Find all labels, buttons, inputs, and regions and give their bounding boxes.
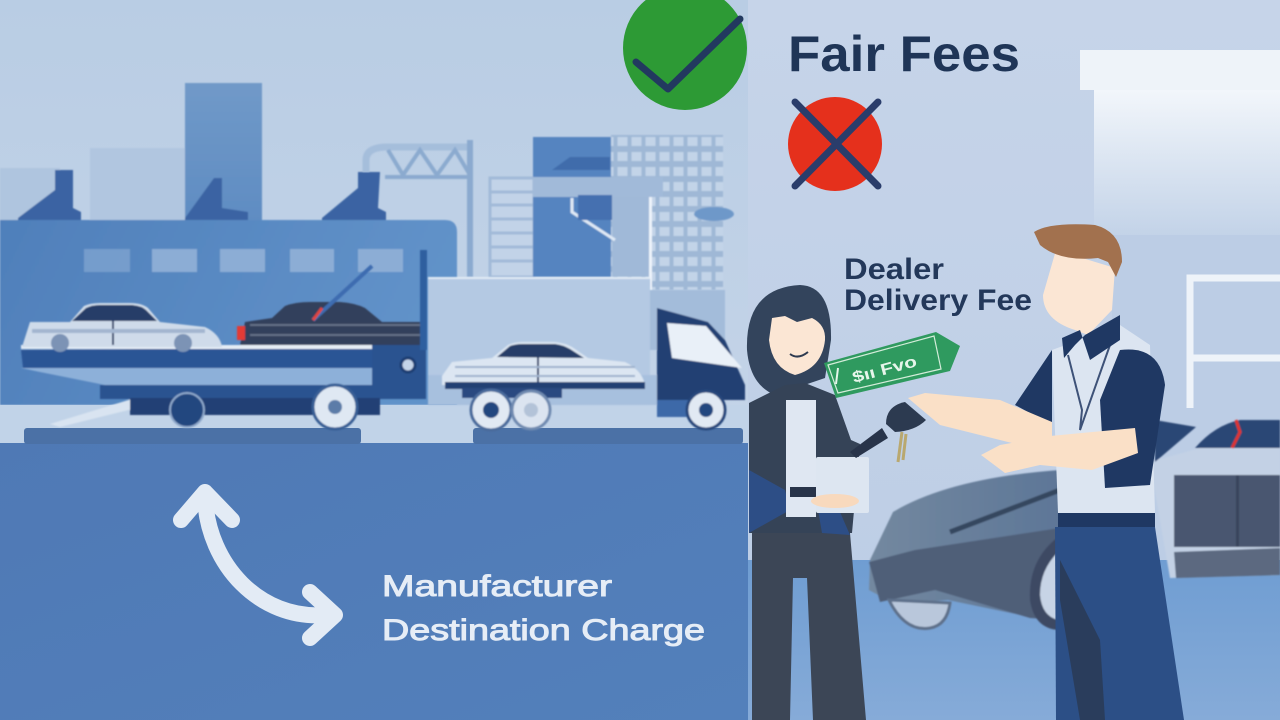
face (769, 316, 825, 375)
forward arm (908, 393, 1052, 446)
label: manufacturer destination charge (382, 570, 705, 647)
pants (1055, 527, 1184, 720)
dark car (237, 266, 420, 345)
lower arm (981, 428, 1138, 473)
hand glove (886, 402, 926, 432)
ladder building (490, 178, 534, 277)
heading: fair fees: Fair Fees (788, 26, 1020, 82)
person: male dealer (908, 224, 1184, 720)
background: right panel (748, 0, 1280, 720)
background: left panel (0, 0, 748, 443)
shirt (786, 400, 816, 517)
label: manufacturer destination charge: Destination Charge (382, 614, 705, 647)
person: woman customer (747, 285, 926, 720)
truss pipe (366, 140, 472, 277)
box (428, 278, 650, 375)
hull (21, 368, 382, 385)
tag: price label: $ıı Fvo (851, 353, 919, 387)
post (420, 250, 427, 350)
ground strip (0, 405, 748, 443)
dark block (533, 137, 611, 277)
background buildings (366, 135, 734, 312)
ramp (50, 394, 157, 427)
right floor (748, 560, 1280, 720)
icon: red cross (788, 97, 882, 191)
chassis (100, 385, 426, 399)
deck (21, 347, 372, 368)
car rear body (1150, 448, 1280, 578)
box truck with car (428, 277, 745, 430)
tablet (816, 457, 869, 513)
hair (747, 285, 831, 395)
factory windows (84, 249, 403, 272)
factory skyline (0, 83, 457, 405)
trailer bar (462, 388, 562, 398)
trailer car (442, 342, 645, 385)
pants (752, 533, 866, 720)
label: dealer delivery fee (844, 253, 1032, 317)
collar (1062, 315, 1120, 360)
small cloud (694, 207, 734, 221)
icon: green check (623, 0, 747, 110)
grid building (611, 135, 723, 290)
sleeve left (1015, 350, 1052, 425)
sleeve right (1100, 349, 1165, 488)
lanyard (1068, 345, 1110, 430)
white car (22, 303, 222, 352)
factory body (0, 220, 457, 405)
car roof (1195, 420, 1280, 448)
icon: double-headed curved arrow (181, 492, 335, 638)
lower left panel (0, 443, 748, 720)
neck and face (1043, 250, 1115, 335)
vest (1052, 325, 1155, 513)
rear cabinet (372, 345, 426, 398)
jacket (749, 383, 860, 533)
parked car (869, 420, 1280, 630)
cab (657, 308, 745, 400)
right: back wall building (1080, 50, 1280, 560)
flatbed truck with two cars (21, 250, 427, 429)
label: manufacturer destination charge: Manufacturer (382, 570, 612, 603)
vents (18, 170, 386, 220)
road plates (24, 428, 743, 444)
car wheels (889, 600, 950, 628)
label: dealer delivery fee: Dealer (844, 253, 944, 286)
wheels (170, 393, 204, 427)
label: dealer delivery fee: Delivery Fee (844, 284, 1032, 317)
window frame (1190, 278, 1280, 408)
tag: price label (824, 332, 960, 398)
car hood (869, 470, 1060, 620)
keys (898, 432, 906, 462)
hair (1034, 224, 1122, 277)
sleeve cuff (850, 428, 888, 458)
car doors (1174, 475, 1280, 547)
